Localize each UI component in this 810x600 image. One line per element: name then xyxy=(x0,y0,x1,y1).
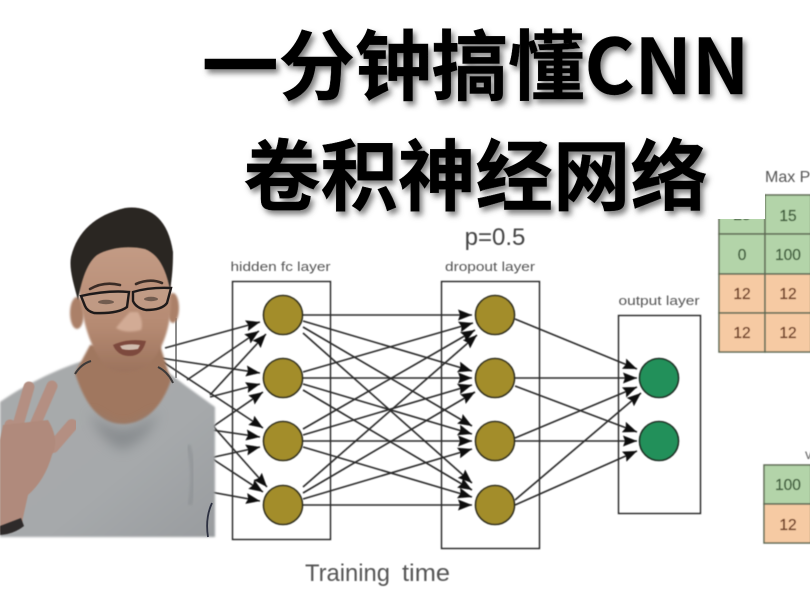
top grid values: 12 xyxy=(733,286,751,303)
top grid values: 25 xyxy=(733,207,751,224)
top grid cells xyxy=(719,195,810,352)
sleeve cuff xyxy=(0,518,24,535)
title line 1: 一分钟搞懂CNN xyxy=(202,6,749,117)
label: output layer: output layer xyxy=(618,293,700,308)
connections: input to hidden xyxy=(160,322,267,501)
top grid values xyxy=(733,207,801,342)
hidden layer box xyxy=(232,282,330,540)
neck xyxy=(75,345,171,424)
collar line xyxy=(75,361,173,383)
connections: hidden to dropout xyxy=(303,315,477,505)
label: dropout layer: dropout layer xyxy=(445,259,536,274)
title line 2: 卷积神经网络 xyxy=(243,115,708,227)
connections: dropout to output xyxy=(515,319,641,505)
caption: Training time: Training xyxy=(305,560,390,587)
sweater edge xyxy=(207,503,212,537)
bottom grid values: 12 xyxy=(779,517,797,534)
top grid values: 12 xyxy=(779,286,797,303)
top grid values: 15 xyxy=(779,208,797,225)
title backdrop xyxy=(0,0,765,219)
bottom grid values xyxy=(775,477,801,534)
output layer nodes xyxy=(640,358,678,460)
glasses xyxy=(81,288,171,313)
eyebrows xyxy=(90,281,162,289)
stray vertical line xyxy=(175,318,177,378)
face xyxy=(78,242,171,372)
eyes xyxy=(98,297,158,304)
dropout layer box xyxy=(442,282,540,548)
presenter photo illustration xyxy=(0,208,215,537)
teeth xyxy=(120,344,140,350)
top grid values: 0 xyxy=(738,247,747,264)
ears xyxy=(70,293,179,329)
right feature-map grid xyxy=(719,169,810,543)
dropout layer nodes xyxy=(476,296,514,524)
label: Max Pool heading: Max P xyxy=(765,169,810,186)
neural network diagram xyxy=(160,224,700,587)
caption: Training time xyxy=(305,560,450,587)
hair xyxy=(70,208,173,300)
output layer box xyxy=(618,316,700,514)
fingers xyxy=(7,386,72,450)
palm and wrist xyxy=(0,420,55,532)
hand xyxy=(0,386,72,532)
caption: Training time: time xyxy=(402,560,450,587)
bottom grid values: 100 xyxy=(775,477,801,494)
label: hidden fc layer: hidden fc layer xyxy=(230,259,331,274)
top grid values: 12 xyxy=(779,325,797,342)
bottom grid cells xyxy=(764,465,810,543)
hidden layer nodes xyxy=(264,296,302,524)
sweater xyxy=(0,362,215,537)
neckline shadow xyxy=(90,412,158,450)
title xyxy=(202,6,749,227)
top grid values: 100 xyxy=(775,247,801,264)
top grid values: 12 xyxy=(733,325,751,342)
nose xyxy=(116,312,142,332)
label: p=0.5: p=0.5 xyxy=(465,224,525,251)
sweater fold xyxy=(188,445,193,505)
mouth xyxy=(113,340,146,356)
